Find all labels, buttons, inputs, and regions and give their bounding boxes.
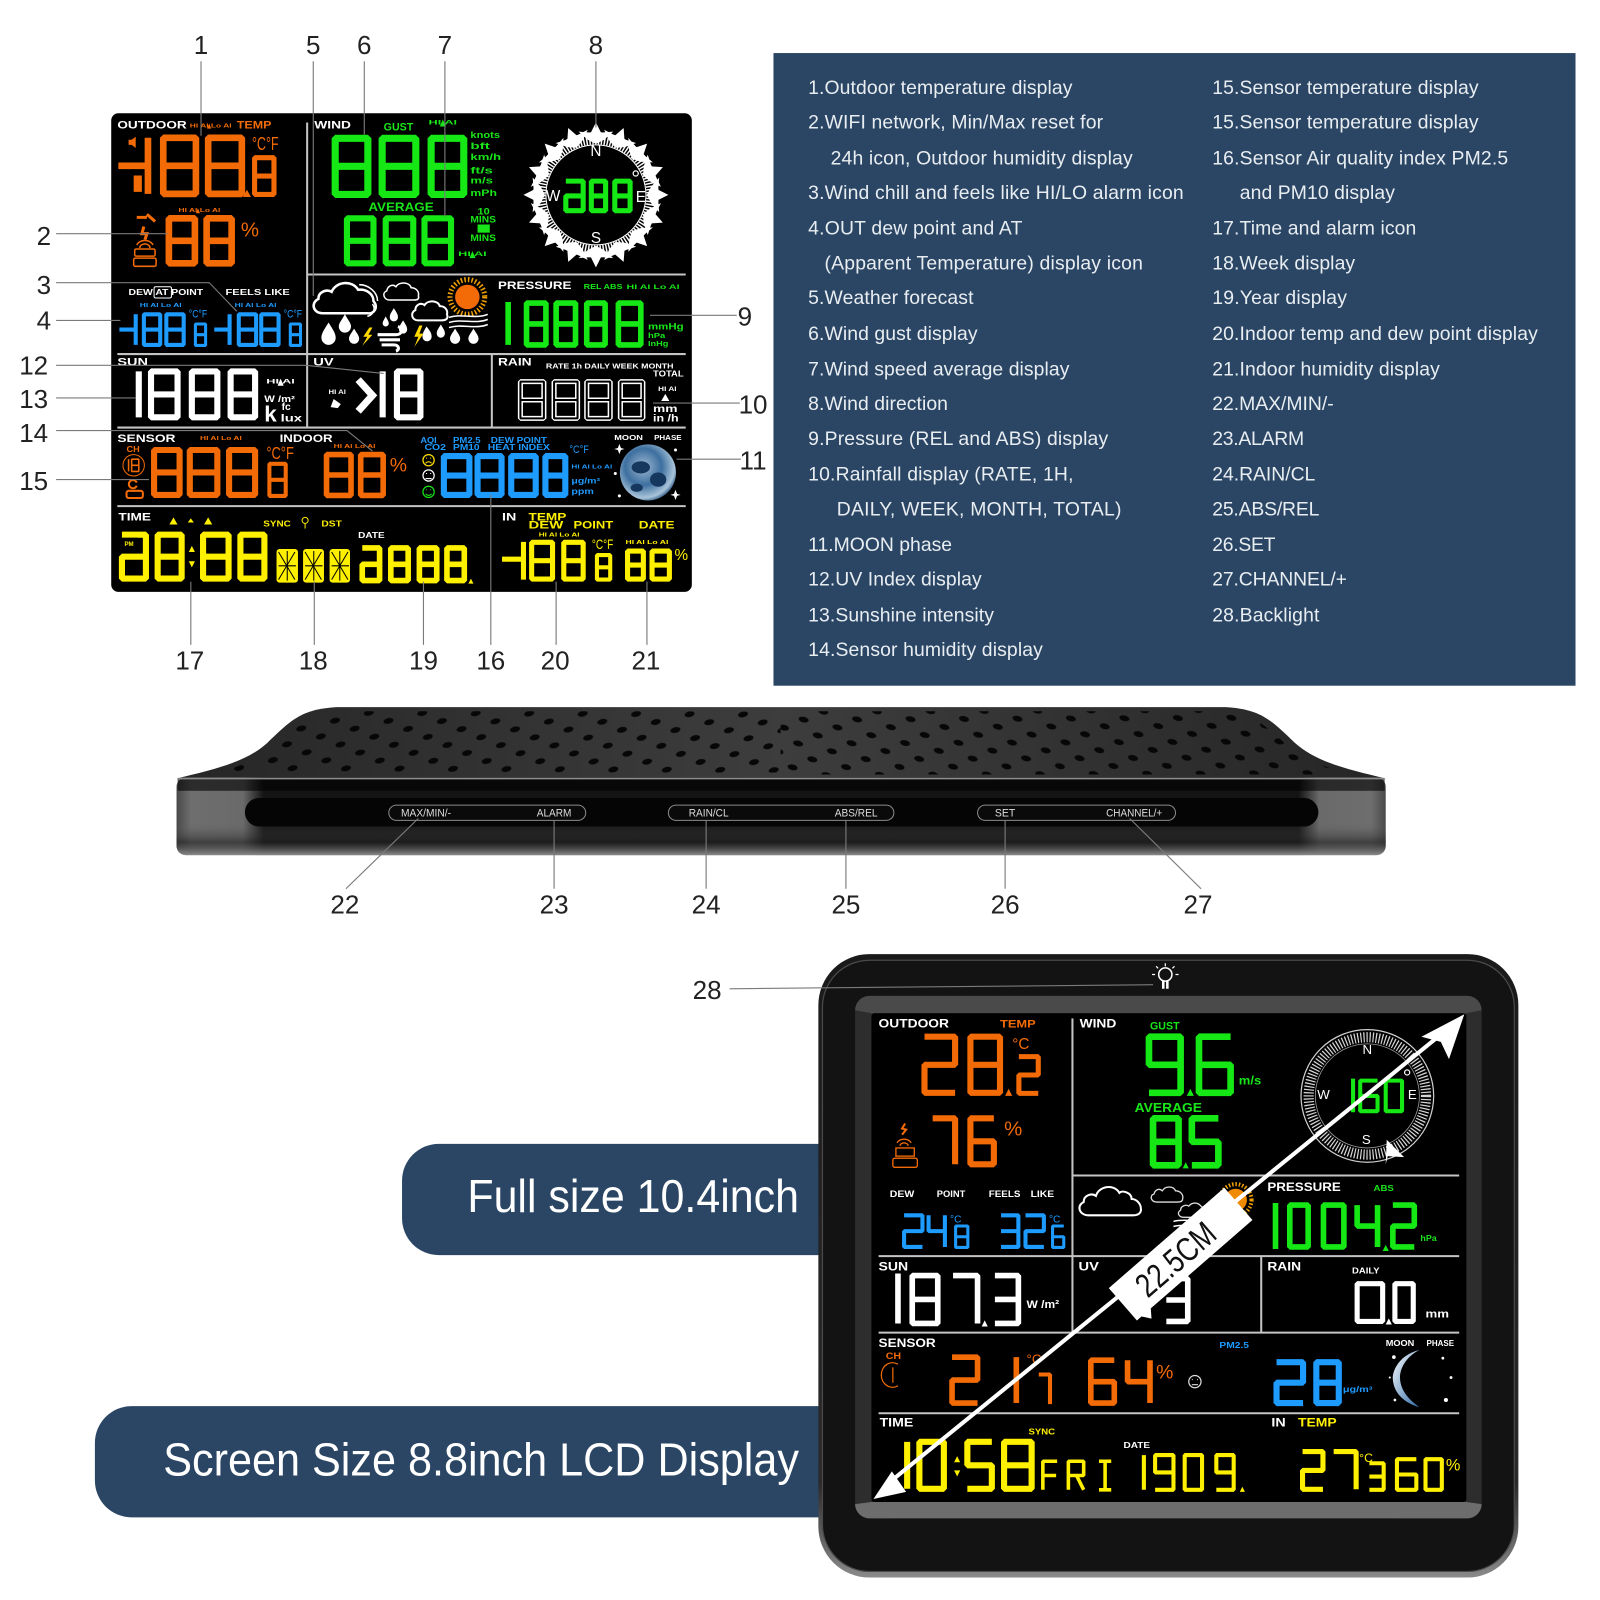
- section: time and date: DATE: [358, 531, 385, 540]
- section: indoor temperature: POINT: [573, 520, 614, 532]
- section: sun intensity: lux: [281, 413, 303, 424]
- LCD layout diagram: [111, 113, 692, 592]
- section: air quality readout: °C°F: [569, 444, 589, 456]
- readout: sun: W /m²: [1027, 1299, 1059, 1311]
- section: outdoor temperature and humidity: °C°F: [252, 133, 279, 154]
- section: indoor temperature: DEW: [529, 520, 564, 532]
- section: indoor temperature: [502, 511, 688, 580]
- readout: wind: [1080, 1017, 1261, 1168]
- section: wind gust and average: WIND: [314, 120, 351, 132]
- callout numbers: buttons: 24: [692, 889, 721, 919]
- section: wind gust and average: AVERAGE: [368, 200, 434, 214]
- section: indoor temperature: HI Al Lo Al: [626, 540, 669, 546]
- readout: dew point and feels like: DEW: [890, 1189, 915, 1199]
- legend column one: 2.WIFI network, Min/Max reset for: [808, 112, 1104, 134]
- pill: full size: Full size 10.4inch: [467, 1170, 799, 1222]
- callout numbers: buttons: 23: [540, 889, 569, 919]
- section: dew point and feels like: HI Al Lo Al: [140, 303, 182, 309]
- section: pressure: [498, 280, 684, 348]
- section: outdoor temperature and humidity: %: [241, 220, 259, 242]
- section: indoor temperature: HI Al Lo Al: [539, 533, 580, 539]
- readout: sensor: PM2.5: [1219, 1340, 1249, 1350]
- legend column two: 21.Indoor humidity display: [1212, 359, 1440, 381]
- readout: rain: DAILY: [1352, 1265, 1380, 1275]
- arrow: screen diagonal dimension: [873, 1014, 1464, 1499]
- callout numbers: LCD diagram: 13: [19, 384, 48, 414]
- legend column two: 20.Indoor temp and dew point display: [1212, 323, 1538, 345]
- section: outdoor temperature and humidity: [117, 120, 279, 266]
- section: sensor and indoor humidity: INDOOR: [280, 433, 333, 445]
- readout: sensor: μg/m³: [1343, 1385, 1373, 1394]
- section: wind gust and average: MINS: [470, 233, 496, 243]
- section: rainfall: HI Al: [658, 386, 677, 393]
- readout: sensor: %: [1156, 1362, 1173, 1384]
- readout: wind: WIND: [1080, 1017, 1117, 1031]
- readout: outdoor: °C: [1012, 1036, 1029, 1053]
- section: dew point and feels like: HI Al Lo Al: [235, 303, 277, 309]
- callout numbers: LCD diagram: 5: [306, 30, 320, 60]
- section: UV index: HI Al: [329, 389, 346, 396]
- readout: pressure: [1267, 1180, 1437, 1251]
- section: wind gust and average: km/h: [470, 152, 502, 162]
- section: indoor temperature: %: [674, 547, 688, 564]
- section: air quality readout: μg/m³: [571, 477, 600, 486]
- section: sensor and indoor humidity: SENSOR: [117, 433, 176, 445]
- callout numbers: LCD diagram: 14: [19, 418, 48, 448]
- panel: legend text: [773, 53, 1576, 686]
- section: pressure: InHg: [648, 339, 669, 348]
- section: sun intensity: k: [264, 401, 277, 426]
- section: indoor temperature: TEMP: [529, 511, 566, 523]
- readout: rain: [1267, 1259, 1449, 1324]
- section: outdoor temperature and humidity: HI Al Lo Al: [190, 124, 232, 130]
- section: UV index: [313, 356, 420, 417]
- section: time and date: [118, 511, 473, 584]
- buttons: ALARM: [537, 807, 571, 819]
- readout: UV: UV: [1079, 1259, 1100, 1273]
- chart: compass wind direction: S: [591, 230, 601, 247]
- section: pressure: REL ABS: [584, 282, 622, 291]
- readout: indoor temperature: IN: [1271, 1416, 1286, 1430]
- section: rainfall: TOTAL: [653, 370, 684, 379]
- legend column two: 15.Sensor temperature display: [1212, 112, 1479, 134]
- section: sensor and indoor humidity: HI Al Lo Al: [334, 444, 376, 450]
- legend column one: 1.Outdoor temperature display: [808, 77, 1073, 99]
- section: air quality readout: [420, 435, 613, 497]
- section: wind gust and average: GUST: [384, 122, 414, 134]
- legend column one: 8.Wind direction: [808, 393, 948, 415]
- readout: time and date: DATE: [1123, 1440, 1150, 1450]
- legend column one: 13.Sunshine intensity: [808, 604, 994, 626]
- section: time and date: SYNC: [263, 520, 291, 529]
- legend column one: 7.Wind speed average display: [808, 359, 1070, 381]
- legend column two: 23.ALARM: [1212, 428, 1304, 450]
- legend column two: 25.ABS/REL: [1212, 498, 1320, 520]
- readout: dew point and feels like: POINT: [937, 1189, 966, 1199]
- callout numbers: LCD diagram: 1: [194, 30, 208, 60]
- readout: wind: m/s: [1239, 1074, 1261, 1088]
- legend column one: 14.Sensor humidity display: [808, 639, 1043, 661]
- section: rainfall: RATE 1h DAILY WEEK MONTH: [546, 361, 673, 370]
- buttons: ABS/REL: [835, 807, 878, 819]
- legend column two: 24.RAIN/CL: [1212, 464, 1316, 486]
- legend column one: 5.Weather forecast: [808, 287, 974, 309]
- section: sun intensity: W /m²: [264, 394, 295, 404]
- section: rainfall: mm: [653, 404, 678, 415]
- device: top and front edge view with buttons: [177, 707, 1386, 855]
- icon: crescent moon: MOON: [1386, 1339, 1414, 1348]
- callout numbers: LCD diagram: 21: [631, 645, 660, 675]
- leader lines: button callouts: [346, 818, 1201, 889]
- callout numbers: buttons: 25: [831, 889, 860, 919]
- buttons: SET: [995, 807, 1015, 819]
- callout numbers: LCD diagram: 9: [738, 302, 752, 332]
- section: rainfall: in /h: [653, 413, 679, 424]
- legend column two: 28.Backlight: [1212, 604, 1320, 626]
- section: wind gust and average: HI Al: [458, 251, 487, 258]
- legend column one: 12.UV Index display: [808, 569, 982, 591]
- section: dew point and feels like: DEW AT POINT: [129, 287, 204, 297]
- legend column two: 17.Time and alarm icon: [1212, 218, 1416, 240]
- readout: outdoor: TEMP: [1000, 1019, 1036, 1031]
- callout numbers: LCD diagram: 19: [409, 645, 438, 675]
- section: sensor and indoor humidity: [117, 433, 407, 498]
- section: pressure: hPa: [648, 331, 666, 340]
- chart: compass: N: [1363, 1042, 1372, 1057]
- legend column one: (Apparent Temperature) display icon: [824, 252, 1143, 274]
- icon: moon phase: PHASE: [654, 434, 682, 442]
- section: sun intensity: HI Al: [266, 379, 295, 386]
- legend column two: 27.CHANNEL/+: [1212, 569, 1347, 591]
- section: wind gust and average: m/s: [470, 176, 493, 186]
- readout: sensor: °C: [1027, 1351, 1042, 1366]
- section: wind gust and average: knots: [470, 130, 500, 140]
- readout: dew point and feels like: LIKE: [1031, 1189, 1054, 1199]
- readout: sensor: [879, 1336, 1373, 1404]
- section: dew point and feels like: [119, 287, 302, 345]
- pill: screen size: [95, 1406, 832, 1517]
- readout: sun: SUN: [879, 1259, 908, 1273]
- section: pressure: PRESSURE: [498, 280, 572, 292]
- callout numbers: buttons: 26: [991, 889, 1020, 919]
- buttons: MAX/MIN/-: [401, 807, 451, 819]
- readout: dew point and feels like: [890, 1189, 1064, 1247]
- readout: wind: GUST: [1150, 1021, 1180, 1033]
- callout numbers: LCD diagram: 15: [19, 466, 48, 496]
- section: outdoor temperature and humidity: TEMP: [237, 120, 271, 132]
- buttons: [389, 805, 1176, 820]
- section: dew point and feels like: °C°F: [284, 308, 302, 320]
- callout numbers: LCD diagram: 3: [37, 270, 51, 300]
- section: time and date: PM: [124, 541, 134, 548]
- icon: weather forecast: [314, 280, 488, 351]
- callout numbers: buttons: 28: [693, 975, 722, 1005]
- legend column two: 16.Sensor Air quality index PM2.5: [1212, 147, 1508, 169]
- readout: dew point and feels like: °C: [950, 1214, 961, 1225]
- legend column one: 24h icon, Outdoor humidity display: [831, 147, 1133, 169]
- chart: compass: [1301, 1030, 1434, 1164]
- readout: UV: [1079, 1259, 1188, 1321]
- buttons: CHANNEL/+: [1106, 807, 1162, 819]
- callout numbers: LCD diagram: [19, 30, 768, 675]
- section: sun intensity: SUN: [117, 356, 148, 368]
- icon: wifi and clear badges: [134, 214, 156, 266]
- legend column two: 22.MAX/MIN/-: [1212, 393, 1334, 415]
- section: air quality readout: PM2.5: [453, 435, 481, 445]
- readout: time and date: SYNC: [1029, 1427, 1056, 1437]
- callout numbers: LCD diagram: 20: [541, 645, 570, 675]
- readout: sensor: CH: [886, 1351, 901, 1361]
- readout: indoor temperature: TEMP: [1298, 1416, 1337, 1430]
- section: outdoor temperature and humidity: OUTDOOR: [117, 120, 187, 132]
- section: outdoor temperature and humidity: HI Al Lo Al: [179, 208, 221, 214]
- section: pressure: mmHg: [648, 322, 684, 332]
- section: sun intensity: fc: [282, 402, 291, 413]
- readout: dew point and feels like: °C: [1049, 1214, 1060, 1225]
- readout: dew point and feels like: FEELS: [989, 1189, 1020, 1199]
- legend column one: DAILY, WEEK, MONTH, TOTAL): [837, 498, 1121, 520]
- section: wind gust and average: 10: [478, 206, 490, 216]
- leader lines: LCD diagram callouts: [56, 61, 741, 645]
- section: sensor and indoor humidity: HI Al Lo Al: [200, 436, 242, 442]
- section: dew point and feels like: °C°F: [189, 308, 207, 320]
- callout numbers: LCD diagram: 12: [19, 350, 48, 380]
- readout: pressure: PRESSURE: [1267, 1180, 1341, 1194]
- legend column one: 11.MOON phase: [808, 534, 952, 556]
- legend column two: 15.Sensor temperature display: [1212, 77, 1479, 99]
- legend column one: 4.OUT dew point and AT: [808, 218, 1023, 240]
- readout: wind: AVERAGE: [1135, 1100, 1202, 1115]
- chart: compass: S: [1362, 1132, 1371, 1147]
- chart: compass: W: [1317, 1087, 1330, 1102]
- section: wind gust and average: ft/s: [470, 165, 493, 175]
- callout numbers: LCD diagram: 11: [740, 445, 767, 475]
- readout: rain: mm: [1426, 1308, 1449, 1320]
- callout numbers: LCD diagram: 10: [739, 389, 768, 419]
- section: air quality readout: HEAT INDEX: [488, 442, 550, 452]
- device: front view: [818, 954, 1518, 1578]
- legend column two: [1212, 77, 1538, 626]
- icon: forecast clouds and sun: [1079, 1184, 1252, 1232]
- readout: pressure: hPa: [1420, 1234, 1437, 1243]
- legend column one: 10.Rainfall display (RATE, 1H,: [808, 464, 1073, 486]
- readout: outdoor: [879, 1017, 1038, 1167]
- chart: compass wind direction: N: [590, 143, 601, 160]
- readout: time and date: [880, 1416, 1245, 1492]
- section: wind gust and average: [314, 119, 502, 263]
- section: pressure: HI Al Lo Al: [627, 284, 680, 291]
- readout: sun: [879, 1259, 1059, 1327]
- chart: compass wind direction: [522, 121, 669, 268]
- callout numbers: LCD diagram: 4: [37, 306, 51, 336]
- section: UV index: UV: [313, 356, 335, 368]
- readout: outdoor: %: [1004, 1119, 1022, 1141]
- readout: indoor temperature: %: [1446, 1456, 1460, 1474]
- section: air quality readout: PM10: [453, 442, 480, 452]
- section: sun intensity: [117, 356, 303, 426]
- icon: moon phase: [614, 434, 682, 501]
- readout: rain: RAIN: [1267, 1259, 1301, 1273]
- device front edge: [177, 778, 1386, 855]
- legend column one: 6.Wind gust display: [808, 323, 978, 345]
- section: dew point and feels like: FEELS LIKE: [226, 287, 290, 297]
- callout numbers: LCD diagram: 2: [37, 221, 51, 251]
- legend column one: 9.Pressure (REL and ABS) display: [808, 428, 1108, 450]
- section: time and date: TIME: [118, 511, 151, 523]
- section: air quality readout: HI Al Lo Al: [571, 464, 613, 470]
- readout: pressure: ABS: [1373, 1183, 1394, 1193]
- callout numbers: LCD diagram: 16: [476, 645, 505, 675]
- section: sensor and indoor humidity: %: [390, 454, 407, 476]
- legend column two: 26.SET: [1212, 534, 1276, 556]
- icon: speaker and battery: [129, 137, 142, 192]
- section: rainfall: [498, 356, 684, 424]
- section: air quality readout: DEW POINT: [491, 435, 548, 445]
- icon: crescent moon: [1386, 1339, 1455, 1407]
- section: wind gust and average: bft: [470, 141, 490, 151]
- section: wind gust and average: HI Al: [429, 119, 458, 126]
- pill: screen size: Screen Size 8.8inch LCD Display: [163, 1434, 799, 1486]
- legend column two: and PM10 display: [1240, 182, 1395, 204]
- section: sensor and indoor humidity: °C°F: [266, 443, 294, 463]
- section: wind gust and average: MINS: [470, 214, 496, 224]
- section: indoor temperature: DATE: [639, 520, 674, 532]
- callout numbers: buttons: [330, 889, 1212, 1005]
- legend column one: 3.Wind chill and feels like HI/LO alarm icon: [808, 182, 1184, 204]
- leader line: backlight: [730, 985, 1153, 989]
- callout numbers: LCD diagram: 8: [589, 30, 603, 60]
- callout numbers: LCD diagram: 7: [438, 30, 452, 60]
- callout numbers: LCD diagram: 18: [299, 645, 328, 675]
- legend column one: [808, 77, 1184, 661]
- section: wind gust and average: mPh: [470, 188, 497, 198]
- section: indoor temperature: IN: [502, 511, 517, 523]
- icon: crescent moon: PHASE: [1427, 1339, 1455, 1348]
- readout: indoor temperature: °C: [1359, 1451, 1373, 1465]
- buttons: RAIN/CL: [689, 807, 729, 819]
- dimension label: [1109, 1188, 1258, 1327]
- section: air quality readout: ppm: [571, 487, 594, 496]
- readout: time and date: TIME: [880, 1416, 913, 1430]
- pill: full size: [402, 1144, 832, 1255]
- section: rainfall: RAIN: [498, 356, 532, 368]
- chart: compass wind direction: E: [636, 189, 646, 206]
- legend column two: 19.Year display: [1212, 287, 1347, 309]
- readout: sensor: SENSOR: [879, 1336, 936, 1350]
- chart: compass: E: [1408, 1087, 1417, 1102]
- section: sensor and indoor humidity: CH: [127, 444, 140, 454]
- icon: backlight bulb: [1152, 963, 1179, 989]
- section: indoor temperature: °C°F: [592, 537, 613, 553]
- readout: outdoor: OUTDOOR: [879, 1017, 949, 1031]
- icon: moon phase: MOON: [614, 434, 643, 442]
- device top with vents: [177, 707, 1386, 779]
- section: time and date: DST: [321, 520, 342, 529]
- section: air quality readout: CO2: [424, 442, 446, 452]
- callout numbers: buttons: 27: [1183, 889, 1212, 919]
- dimension label: 22.5CM: [1129, 1215, 1224, 1305]
- readout: indoor temperature: [1271, 1416, 1460, 1490]
- callout numbers: LCD diagram: 6: [357, 30, 372, 60]
- callout numbers: LCD diagram: 17: [175, 645, 204, 675]
- chart: compass wind direction: W: [546, 188, 561, 205]
- callout numbers: buttons: 22: [330, 889, 359, 919]
- section: air quality readout: AQI: [420, 435, 437, 445]
- legend column two: 18.Week display: [1212, 252, 1355, 274]
